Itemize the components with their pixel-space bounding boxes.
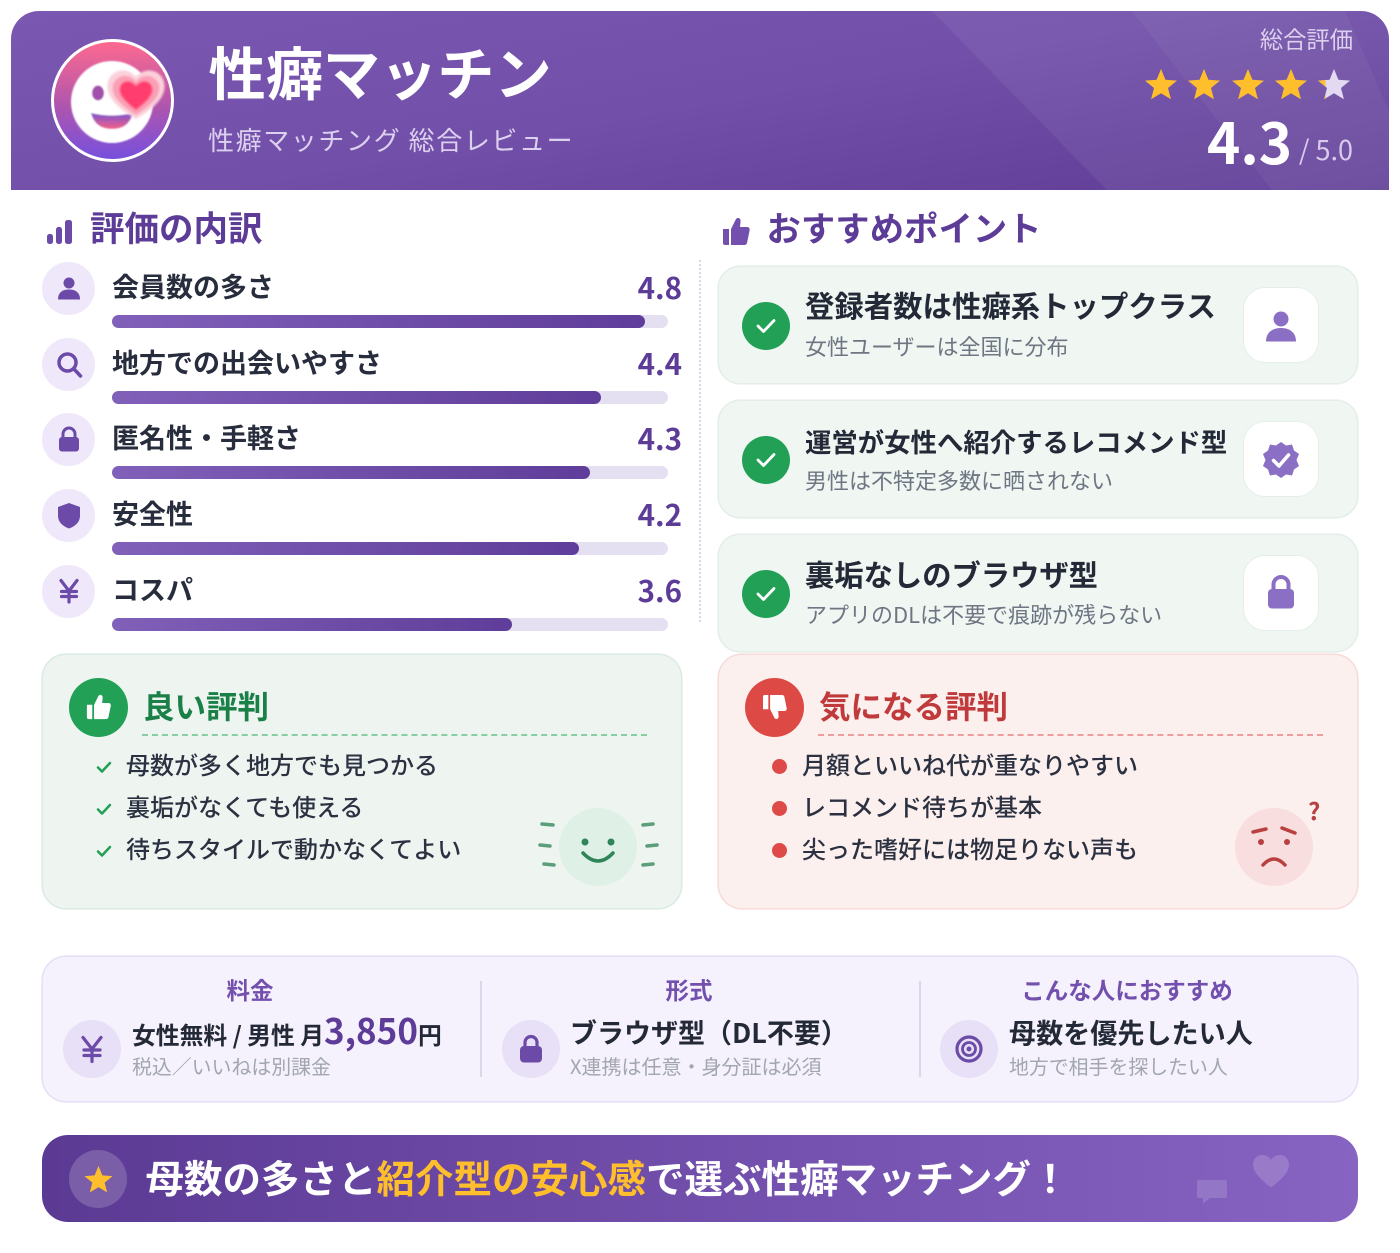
logo: smiling face with heart bbox=[51, 39, 174, 162]
item: monthly fee: 月額といいね代が重なりやすい bbox=[802, 746, 1138, 781]
score: 3.6 bbox=[638, 569, 682, 611]
icon: shield bbox=[42, 489, 95, 542]
star rating bbox=[1145, 69, 1350, 100]
rating row: value for money bbox=[42, 565, 682, 631]
bar bbox=[112, 618, 668, 631]
price text: 女性無料 / 男性 月3,850円 bbox=[132, 1004, 442, 1055]
rating row: anonymity bbox=[42, 413, 682, 479]
recommendation note: 地方で相手を探したい人 bbox=[1009, 1051, 1228, 1080]
item: niche preferences: 尖った嗜好には物足りない声も bbox=[802, 830, 1138, 865]
icon: yen bbox=[42, 565, 95, 618]
price note: 税込／いいねは別課金 bbox=[132, 1051, 331, 1080]
card description: 女性ユーザーは全国に分布 bbox=[805, 330, 1069, 362]
rating row: members bbox=[42, 262, 682, 328]
item: waiting style: 待ちスタイルで動かなくてよい bbox=[126, 830, 461, 865]
icon: lock bbox=[502, 1020, 560, 1078]
icon: person bbox=[1243, 287, 1319, 363]
header background facets bbox=[932, 11, 1389, 190]
icon: person bbox=[42, 262, 95, 315]
bar bbox=[112, 466, 668, 479]
heading: rating breakdown bbox=[47, 201, 262, 251]
icon: check bbox=[742, 436, 790, 484]
icon: check bbox=[742, 570, 790, 618]
icon: verified badge bbox=[1243, 421, 1319, 497]
icon: chat bubble bbox=[1197, 1180, 1227, 1204]
card title: 運営が女性へ紹介するレコメンド型 bbox=[805, 421, 1227, 460]
score: 4.2 bbox=[638, 493, 682, 535]
card description: 男性は不特定多数に晒されない bbox=[805, 464, 1113, 496]
card: recommendation model bbox=[718, 400, 1358, 518]
label: 安全性 bbox=[112, 493, 193, 532]
card title: 裏垢なしのブラウザ型 bbox=[805, 553, 1098, 595]
panel heading: 良い評判 bbox=[143, 682, 269, 728]
icon: search bbox=[42, 338, 95, 391]
recommendation text: 母数を優先したい人 bbox=[1009, 1012, 1253, 1051]
score maximum: / 5.0 bbox=[1299, 129, 1353, 168]
bar bbox=[112, 315, 668, 328]
icon: yen bbox=[63, 1020, 121, 1078]
label: 地方での出会いやすさ bbox=[112, 342, 382, 381]
banner message: 母数の多さと紹介型の安心感で選ぶ性癖マッチング！ bbox=[146, 1149, 1070, 1205]
card title: 登録者数は性癖系トップクラス bbox=[805, 284, 1216, 326]
title: 性癖マッチン bbox=[208, 30, 552, 112]
bar bbox=[112, 391, 668, 404]
column heading: 形式 bbox=[666, 972, 712, 1006]
heading: recommended points bbox=[723, 201, 1042, 251]
item: no secret account: 裏垢がなくても使える bbox=[126, 788, 363, 823]
icon: target bbox=[940, 1020, 998, 1078]
panel: good reviews bbox=[42, 654, 682, 909]
icon: smiling face bbox=[538, 808, 659, 886]
card description: アプリのDLは不要で痕跡が残らない bbox=[805, 598, 1162, 630]
panel heading: 気になる評判 bbox=[819, 682, 1008, 728]
item: many members: 母数が多く地方でも見つかる bbox=[126, 746, 438, 781]
icon: thumbs up bbox=[723, 218, 750, 245]
format note: X連携は任意・身分証は必須 bbox=[570, 1051, 821, 1080]
rating row: safety bbox=[42, 489, 682, 555]
label: 匿名性・手軽さ bbox=[112, 417, 301, 456]
list of good points bbox=[96, 746, 461, 865]
overall rating label: 総合評価 bbox=[1260, 21, 1353, 55]
column: format bbox=[502, 972, 848, 1080]
column: price bbox=[63, 972, 442, 1080]
icon: check bbox=[742, 302, 790, 350]
icon: bar chart bbox=[47, 220, 72, 244]
heading text: 評価の内訳 bbox=[90, 201, 262, 251]
icon: lock bbox=[42, 413, 95, 466]
column: recommended for bbox=[940, 972, 1253, 1080]
column heading: こんな人におすすめ bbox=[1021, 972, 1233, 1006]
panel: key facts bbox=[42, 956, 1358, 1102]
rating row: regional bbox=[42, 338, 682, 404]
icon: worried face bbox=[1235, 792, 1320, 886]
heading text: おすすめポイント bbox=[766, 201, 1042, 251]
overall score: 4.3 bbox=[1207, 99, 1292, 181]
bar bbox=[112, 542, 668, 555]
icon: heart bbox=[1253, 1155, 1289, 1188]
label: コスパ bbox=[112, 569, 193, 608]
icon: lock bbox=[1243, 555, 1319, 631]
bottom call-to-action banner bbox=[42, 1135, 1358, 1222]
icon: worried face: ? bbox=[1308, 792, 1320, 827]
score: 4.4 bbox=[638, 342, 682, 384]
card: member base bbox=[718, 266, 1358, 384]
subtitle: 性癖マッチング 総合レビュー bbox=[208, 121, 574, 158]
header banner bbox=[11, 11, 1389, 190]
panel: concerns bbox=[718, 654, 1358, 909]
score: 4.3 bbox=[638, 417, 682, 459]
label: 会員数の多さ bbox=[112, 266, 274, 305]
column heading: 料金 bbox=[226, 972, 274, 1006]
score: 4.8 bbox=[638, 266, 682, 308]
item: waiting for recommendation: レコメンド待ちが基本 bbox=[802, 788, 1042, 823]
icon: thumbs up bbox=[69, 678, 128, 737]
icon: thumbs down bbox=[745, 678, 804, 737]
icon: star bbox=[69, 1150, 127, 1208]
list of concerns bbox=[772, 746, 1138, 865]
card: browser based bbox=[718, 534, 1358, 652]
format text: ブラウザ型（DL不要） bbox=[570, 1012, 848, 1051]
rating breakdown list bbox=[42, 262, 682, 631]
